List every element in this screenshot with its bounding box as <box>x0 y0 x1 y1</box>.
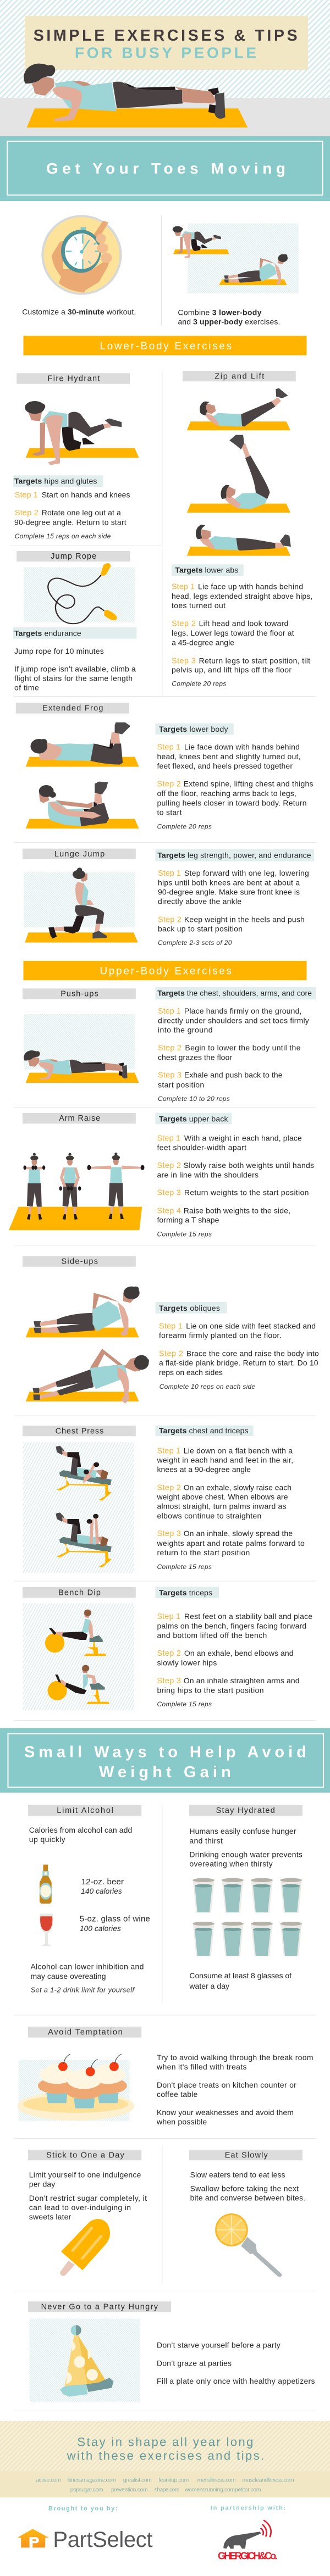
panel: Extended Frog <box>16 703 313 830</box>
tips: Fill a plate only once with healthy appetizers <box>157 2377 315 2385</box>
instructions: Jump rope for 10 minutes <box>14 647 104 655</box>
steps <box>158 869 309 933</box>
intro: and thirst <box>189 1836 223 1845</box>
title box <box>25 16 308 70</box>
steps: Lie down on a flat bench with a <box>184 1446 293 1455</box>
targets: Targets endurance <box>14 628 81 637</box>
heading <box>189 2150 302 2160</box>
reps note: Complete 10 to 20 reps <box>158 1095 230 1103</box>
steps: 90-degree angle. Return to start <box>14 518 127 526</box>
illustration: arm raise three poses <box>9 1153 145 1230</box>
steps <box>157 1133 314 1225</box>
section banner: Lower-Body Exercises: Lower-Body Exercises <box>100 341 232 352</box>
steps: Begin to lower the body until the <box>185 1043 301 1052</box>
icons: beer bottle and wine glass <box>40 1865 53 1946</box>
steps: Step 1 <box>159 1322 183 1331</box>
sources: greatist.com <box>123 2477 152 2484</box>
logo text: PartSelect <box>53 2528 153 2552</box>
steps: head, legs extended straight above hips, <box>172 592 312 600</box>
heading <box>183 371 296 381</box>
steps <box>157 743 314 816</box>
steps <box>157 1612 312 1694</box>
caption: customize workout: Customize a 30-minute workout. <box>22 307 136 316</box>
steps: Brace the core and raise the body into <box>186 1349 319 1357</box>
targets: Targets lower body <box>159 725 228 733</box>
logo text: GHERGICH&Co. <box>218 2550 277 2561</box>
tips: Don’t starve yourself before a party <box>157 2341 280 2350</box>
steps: weight in each hand and feet in the air, <box>156 1455 293 1464</box>
targets: Targets obliques <box>159 1304 220 1312</box>
intro: Calories from alcohol can add <box>29 1826 132 1834</box>
panel: Avoid Temptation <box>17 2027 313 2126</box>
heading <box>23 849 136 859</box>
heading: Eat Slowly <box>225 2151 268 2160</box>
intro <box>189 1827 302 1868</box>
icon: popsicle <box>60 2219 110 2276</box>
tips: bite and converse between bites. <box>190 2193 305 2202</box>
panel: closing message <box>0 2421 330 2497</box>
tips: coffee table <box>157 2090 198 2099</box>
panel: 30-minute workout <box>22 215 136 316</box>
divider <box>14 1107 316 1108</box>
sources: leanitup.com <box>159 2477 189 2484</box>
steps: Lie on one side with feet stacked and <box>186 1322 316 1331</box>
icon: stopwatch in hand <box>41 215 122 295</box>
section banner: Lower-Body Exercises <box>23 336 307 355</box>
steps: start position <box>158 1080 204 1089</box>
heading: Side-ups <box>61 1258 98 1266</box>
closing advice: Consume at least 8 glasses of <box>189 1971 292 1980</box>
steps: Step 2 <box>15 509 38 518</box>
credit: Ghergich & Co. <box>211 2505 285 2561</box>
section banner: Small Ways to Help Avoid Weight Gain <box>0 1728 330 1793</box>
panel: Push-ups <box>23 987 316 1103</box>
sources: mensfitness.com <box>197 2477 236 2484</box>
tips: Don't restrict sugar completely, it <box>29 2194 147 2202</box>
illustration: woman doing plank on mat <box>24 64 248 127</box>
instructions: of time <box>14 683 39 692</box>
sources: fitnessmagazine.com <box>67 2477 116 2484</box>
steps: weight above chest. When elbows are <box>156 1492 288 1501</box>
steps: Step 3 <box>157 1529 181 1538</box>
steps: toes turned out <box>172 601 226 610</box>
heading: Chest Press <box>56 1427 103 1436</box>
steps: With a weight in each hand, place <box>184 1133 302 1142</box>
steps: Step 1 <box>15 491 38 499</box>
steps: Lie face down with hands behind <box>184 743 300 752</box>
panel: Side-ups <box>23 1256 319 1404</box>
steps: Step 1 <box>157 1134 180 1143</box>
sources: shape.com <box>155 2486 180 2493</box>
title line 2: FOR BUSY PEOPLE <box>75 44 256 61</box>
panel: Chest Press <box>23 1426 305 1573</box>
heading <box>189 1805 302 1816</box>
sources: popsugar.com <box>70 2486 103 2493</box>
panel: Limit Alcohol <box>28 1805 150 1994</box>
steps: into the ground <box>158 1025 212 1034</box>
steps: Step 4 <box>157 1206 181 1215</box>
steps: pulling heels closer in toward body. Return <box>157 798 307 807</box>
steps: a 45-degree angle <box>172 638 234 647</box>
steps: Step 2 <box>157 1649 181 1658</box>
heading: Stick to One a Day <box>46 2151 125 2160</box>
illustration: bench dip with stability ball <box>23 1603 134 1710</box>
heading: Bench Dip <box>58 1588 101 1597</box>
heading <box>16 703 129 714</box>
heading: Limit Alcohol <box>57 1806 113 1815</box>
steps: Keep weight in the heels and push <box>184 915 305 923</box>
steps: pelvis up, and lift hips off the floor <box>172 665 292 674</box>
steps: forearm firmly planted on the floor. <box>159 1331 282 1340</box>
steps: Step 2 <box>158 1044 182 1053</box>
illustration: fire hydrant pose <box>25 401 139 465</box>
beer calories: 12-oz. beer <box>81 1877 124 1887</box>
tips: Don't place treats on kitchen counter or <box>157 2080 296 2089</box>
steps: Step 3 <box>158 1071 182 1080</box>
illustration: side-up poses <box>26 1287 149 1404</box>
panel: Stay Hydrated <box>189 1805 302 1990</box>
steps: off the floor, reaching arms back to legs, <box>157 789 296 798</box>
heading: Fire Hydrant <box>47 375 100 383</box>
caption: combine: Combine 3 lower-body <box>178 308 262 316</box>
steps: On an inhale, slowly spread the <box>184 1529 293 1538</box>
sources: womensrunning.competitor.com <box>184 2486 261 2493</box>
steps: Step forward with one leg, lowering <box>184 869 309 877</box>
icon: elephant with signal <box>223 2520 271 2549</box>
closing advice <box>189 1971 292 1990</box>
targets: Targets hips and glutes <box>14 477 97 486</box>
intro <box>29 1826 132 1844</box>
steps: Raise both weights to the side, <box>184 1206 290 1215</box>
title line 1: SIMPLE EXERCISES & TIPS <box>34 27 298 44</box>
steps: directly above the ankle <box>158 897 241 906</box>
illustration: lunge <box>24 867 138 943</box>
steps: Step 1 <box>172 583 195 592</box>
instructions <box>14 647 136 692</box>
steps: are in line with the shoulders <box>157 1170 258 1179</box>
panel: Lunge Jump <box>23 849 314 947</box>
tips: Swallow before taking the next <box>190 2184 299 2193</box>
tips <box>29 2171 147 2221</box>
steps: Step 3 <box>157 1677 181 1685</box>
tips: can lead to over-indulging in <box>29 2203 131 2212</box>
reps note: Complete 20 reps <box>172 680 226 688</box>
header: hatch background and floor <box>0 0 330 137</box>
steps: Return legs to start position, tilt <box>199 656 310 665</box>
targets <box>155 1587 219 1598</box>
reps note: Complete 15 reps <box>157 1563 212 1571</box>
divider <box>14 696 316 697</box>
credit: PartSelect: Brought to you by: <box>48 2505 118 2512</box>
closing advice: Set a 1-2 drink limit for yourself <box>31 1986 135 1994</box>
section banner: Upper-Body Exercises <box>23 961 307 980</box>
steps: Step 2 <box>158 915 182 924</box>
closing text: Stay in shape all year long <box>77 2435 253 2449</box>
steps: Start on hands and knees <box>42 490 130 499</box>
tips <box>190 2171 305 2202</box>
tips: Don’t graze at parties <box>157 2358 232 2367</box>
section banner: Upper-Body Exercises: Upper-Body Exercises <box>100 965 232 977</box>
reps note: Complete 20 reps <box>157 822 212 830</box>
targets: Targets upper back <box>159 1114 229 1123</box>
section banner: Small Ways to Help Avoid Weight Gain: Weight Gain <box>99 1763 231 1781</box>
steps: Place hands firmly on the ground, <box>184 1006 301 1015</box>
heading: Arm Raise <box>59 1114 100 1123</box>
targets: Targets lower abs <box>175 566 238 575</box>
reps note: Complete 2-3 sets of 20 <box>158 939 232 947</box>
heading <box>23 1426 136 1436</box>
sources <box>36 2477 294 2493</box>
tips: when possible <box>156 2117 207 2126</box>
steps <box>172 582 312 674</box>
illustration: chest press on bench <box>23 1442 134 1573</box>
heading <box>28 1805 141 1816</box>
tips: Know your weaknesses and avoid them <box>157 2108 294 2117</box>
steps: elbows continue to straighten <box>157 1511 261 1520</box>
steps: Step 1 <box>157 1612 180 1621</box>
divider <box>14 842 316 843</box>
steps: 90-degree angle. Make sure front knee is <box>158 888 300 897</box>
tips: per day <box>29 2180 55 2189</box>
panel: Arm Raise <box>9 1113 314 1238</box>
steps <box>14 490 130 526</box>
panel: Bench Dip <box>23 1587 312 1710</box>
tips <box>156 2053 314 2126</box>
steps: reps on each sides <box>159 1368 223 1377</box>
steps: feet shoulder-width apart <box>157 1143 246 1151</box>
divider <box>161 215 162 326</box>
steps: almost straight, turn palms inward as <box>157 1502 286 1511</box>
intro: up quickly <box>29 1835 65 1844</box>
reps note: Complete 10 reps on each side <box>160 1383 256 1390</box>
heading: Never Go to a Party Hungry <box>41 2303 158 2312</box>
beer calories <box>81 1877 124 1895</box>
steps: Return weights to the start position <box>184 1188 309 1197</box>
steps: Step 1 <box>157 743 180 752</box>
targets: Targets triceps <box>159 1588 212 1597</box>
steps: Step 1 <box>158 1007 181 1016</box>
steps: directly under shoulders and set toes firmly <box>158 1016 309 1025</box>
targets: Targets the chest, shoulders, arms, and core <box>157 988 312 997</box>
closing advice: water a day <box>189 1982 229 1990</box>
icon: orange slice on fork <box>215 2213 279 2275</box>
steps: Step 3 <box>157 1189 181 1198</box>
heading: Avoid Temptation <box>48 2028 123 2037</box>
illustration: extended frog poses <box>26 722 139 828</box>
steps: legs. Lower legs toward the floor at <box>172 628 294 637</box>
steps: Slowly raise both weights until hands <box>184 1161 314 1170</box>
heading <box>28 2027 141 2038</box>
heading: Lunge Jump <box>54 850 105 859</box>
heading <box>16 551 130 561</box>
targets <box>172 564 244 576</box>
heading <box>28 2150 141 2160</box>
steps: Step 2 <box>172 620 196 628</box>
steps: Step 2 <box>157 1161 181 1170</box>
section banner: Small Ways to Help Avoid Weight Gain: Small Ways to Help Avoid <box>24 1743 306 1761</box>
steps: On an inhale straighten arms and <box>184 1676 300 1685</box>
closing text: with these exercises and tips. <box>67 2449 264 2462</box>
steps: forming a T shape <box>157 1216 219 1225</box>
illustration: zip and lift poses <box>187 388 291 556</box>
steps: Lift head and look toward <box>199 619 288 628</box>
tips: Slow eaters tend to eat less <box>190 2171 285 2179</box>
steps: Step 2 <box>157 780 181 789</box>
heading <box>23 988 136 999</box>
tips: sweets later <box>29 2212 72 2221</box>
steps: Step 2 <box>159 1349 183 1358</box>
beer calories: 140 calories <box>81 1887 122 1895</box>
steps: Extend spine, lifting chest and thighs <box>184 780 314 788</box>
panel: Jump Rope <box>13 551 136 692</box>
heading <box>23 1113 136 1123</box>
heading: Stay Hydrated <box>216 1806 275 1815</box>
section banner: Get Your Toes Moving <box>0 136 330 201</box>
steps: to start <box>157 808 182 816</box>
steps: slowly lower hips <box>157 1658 217 1667</box>
reps note: Complete 15 reps <box>157 1700 212 1708</box>
tips: Limit yourself to one indulgence <box>29 2171 141 2179</box>
heading: Jump Rope <box>51 552 96 561</box>
tips <box>157 2341 315 2385</box>
panel: Stick to One a Day <box>28 2150 147 2276</box>
steps: chest grazes the floor <box>158 1053 232 1061</box>
steps: Rest feet on a stability ball and place <box>184 1612 312 1621</box>
steps: back up to start position <box>158 925 243 933</box>
steps: palms on the bench, fingers facing forward <box>157 1621 306 1630</box>
divider <box>14 1581 316 1582</box>
heading <box>28 2301 171 2312</box>
divider <box>14 1720 316 1721</box>
wine calories <box>80 1915 150 1933</box>
steps <box>158 1006 309 1089</box>
divider <box>14 2015 316 2016</box>
targets <box>155 724 234 735</box>
steps: Step 1 <box>157 1446 180 1455</box>
illustration: two small exercises on hatch <box>173 224 299 293</box>
panel: Fire Hydrant <box>13 373 139 540</box>
closing text <box>67 2435 264 2462</box>
targets <box>155 1302 227 1314</box>
tips: Try to avoid walking through the break room <box>157 2053 314 2062</box>
intro: Humans easily confuse hunger <box>189 1827 296 1835</box>
heading: Zip and Lift <box>215 372 264 381</box>
steps <box>156 1446 305 1557</box>
steps: head, knees bent and slightly turned out, <box>157 752 300 761</box>
divider <box>14 2138 316 2139</box>
section banner: Get Your Toes Moving: Get Your Toes Moving <box>46 160 285 177</box>
credit: Ghergich & Co.: In partnership with: <box>211 2505 285 2511</box>
closing advice <box>31 1962 144 1994</box>
steps: On an exhale, bend elbows and <box>184 1649 294 1657</box>
steps: Step 3 <box>172 656 196 665</box>
panel: combine exercises <box>173 224 299 326</box>
steps: Step 1 <box>158 869 181 878</box>
reps note: Complete 15 reps <box>157 1231 212 1238</box>
illustration: party hat <box>30 2319 140 2402</box>
steps: On an exhale, slowly raise each <box>184 1483 292 1492</box>
divider <box>14 1415 316 1416</box>
panel: Never Go to a Party Hungry <box>28 2301 315 2402</box>
tips: when it's filled with treats <box>156 2062 246 2071</box>
reps note: Complete 15 reps on each side <box>15 532 111 540</box>
steps: return to the start position <box>157 1548 250 1557</box>
sources: muscleandfitness.com <box>242 2477 294 2484</box>
steps: knees at a 90-degree angle <box>157 1465 251 1474</box>
steps <box>159 1322 319 1377</box>
panel: Zip and Lift <box>172 371 312 688</box>
targets <box>13 627 136 639</box>
steps: weights apart and rotate palms forward to <box>156 1539 305 1548</box>
illustration: cupcakes on a plate <box>17 2054 134 2121</box>
panel: combine exercises: and 3 upper-body exercises. <box>178 317 280 326</box>
sources: prevention.com <box>111 2486 148 2493</box>
instructions: If jump rope isn’t available, climb a <box>14 665 136 674</box>
steps: Lie face up with hands behind <box>198 582 303 591</box>
credit: PartSelect <box>17 2505 152 2552</box>
wine calories: 5-oz. glass of wine <box>80 1915 150 1924</box>
heading <box>23 1256 136 1267</box>
icons: eight water glasses <box>193 1878 302 1956</box>
wine calories: 100 calories <box>80 1924 121 1933</box>
targets <box>155 987 316 999</box>
panel: Eat Slowly <box>189 2150 305 2275</box>
icon: PartSelect house <box>17 2529 49 2547</box>
steps: and bottom lifted off the bench <box>157 1631 267 1639</box>
targets: Targets leg strength, power, and endurance <box>157 851 311 860</box>
heading <box>16 373 130 384</box>
sources: active.com <box>36 2477 61 2484</box>
steps: Exhale and push back to the <box>184 1071 283 1080</box>
closing advice: Alcohol can lower inhibition and <box>31 1962 144 1971</box>
steps: bring hips to the start position <box>157 1685 264 1694</box>
steps: feet flexed, and heels pressed together <box>157 761 293 770</box>
heading: Push-ups <box>61 989 98 998</box>
steps: hips until both knees are bent at about a <box>158 878 300 887</box>
instructions: flight of stairs for the same length <box>14 674 133 683</box>
steps: Step 2 <box>157 1483 181 1492</box>
intro: Drinking enough water prevents <box>189 1850 302 1859</box>
closing advice: may cause overeating <box>31 1972 106 1980</box>
steps: a flat-side plank bridge. Return to start. Do 10 <box>159 1359 318 1367</box>
heading <box>23 1587 136 1598</box>
illustration: jump rope <box>24 563 135 624</box>
intro: overeating when thirsty <box>189 1859 273 1868</box>
steps: Rotate one leg out at a <box>42 508 121 517</box>
targets: Targets chest and triceps <box>159 1426 249 1435</box>
illustration: push-up <box>24 1014 139 1083</box>
heading: Extended Frog <box>42 704 103 713</box>
